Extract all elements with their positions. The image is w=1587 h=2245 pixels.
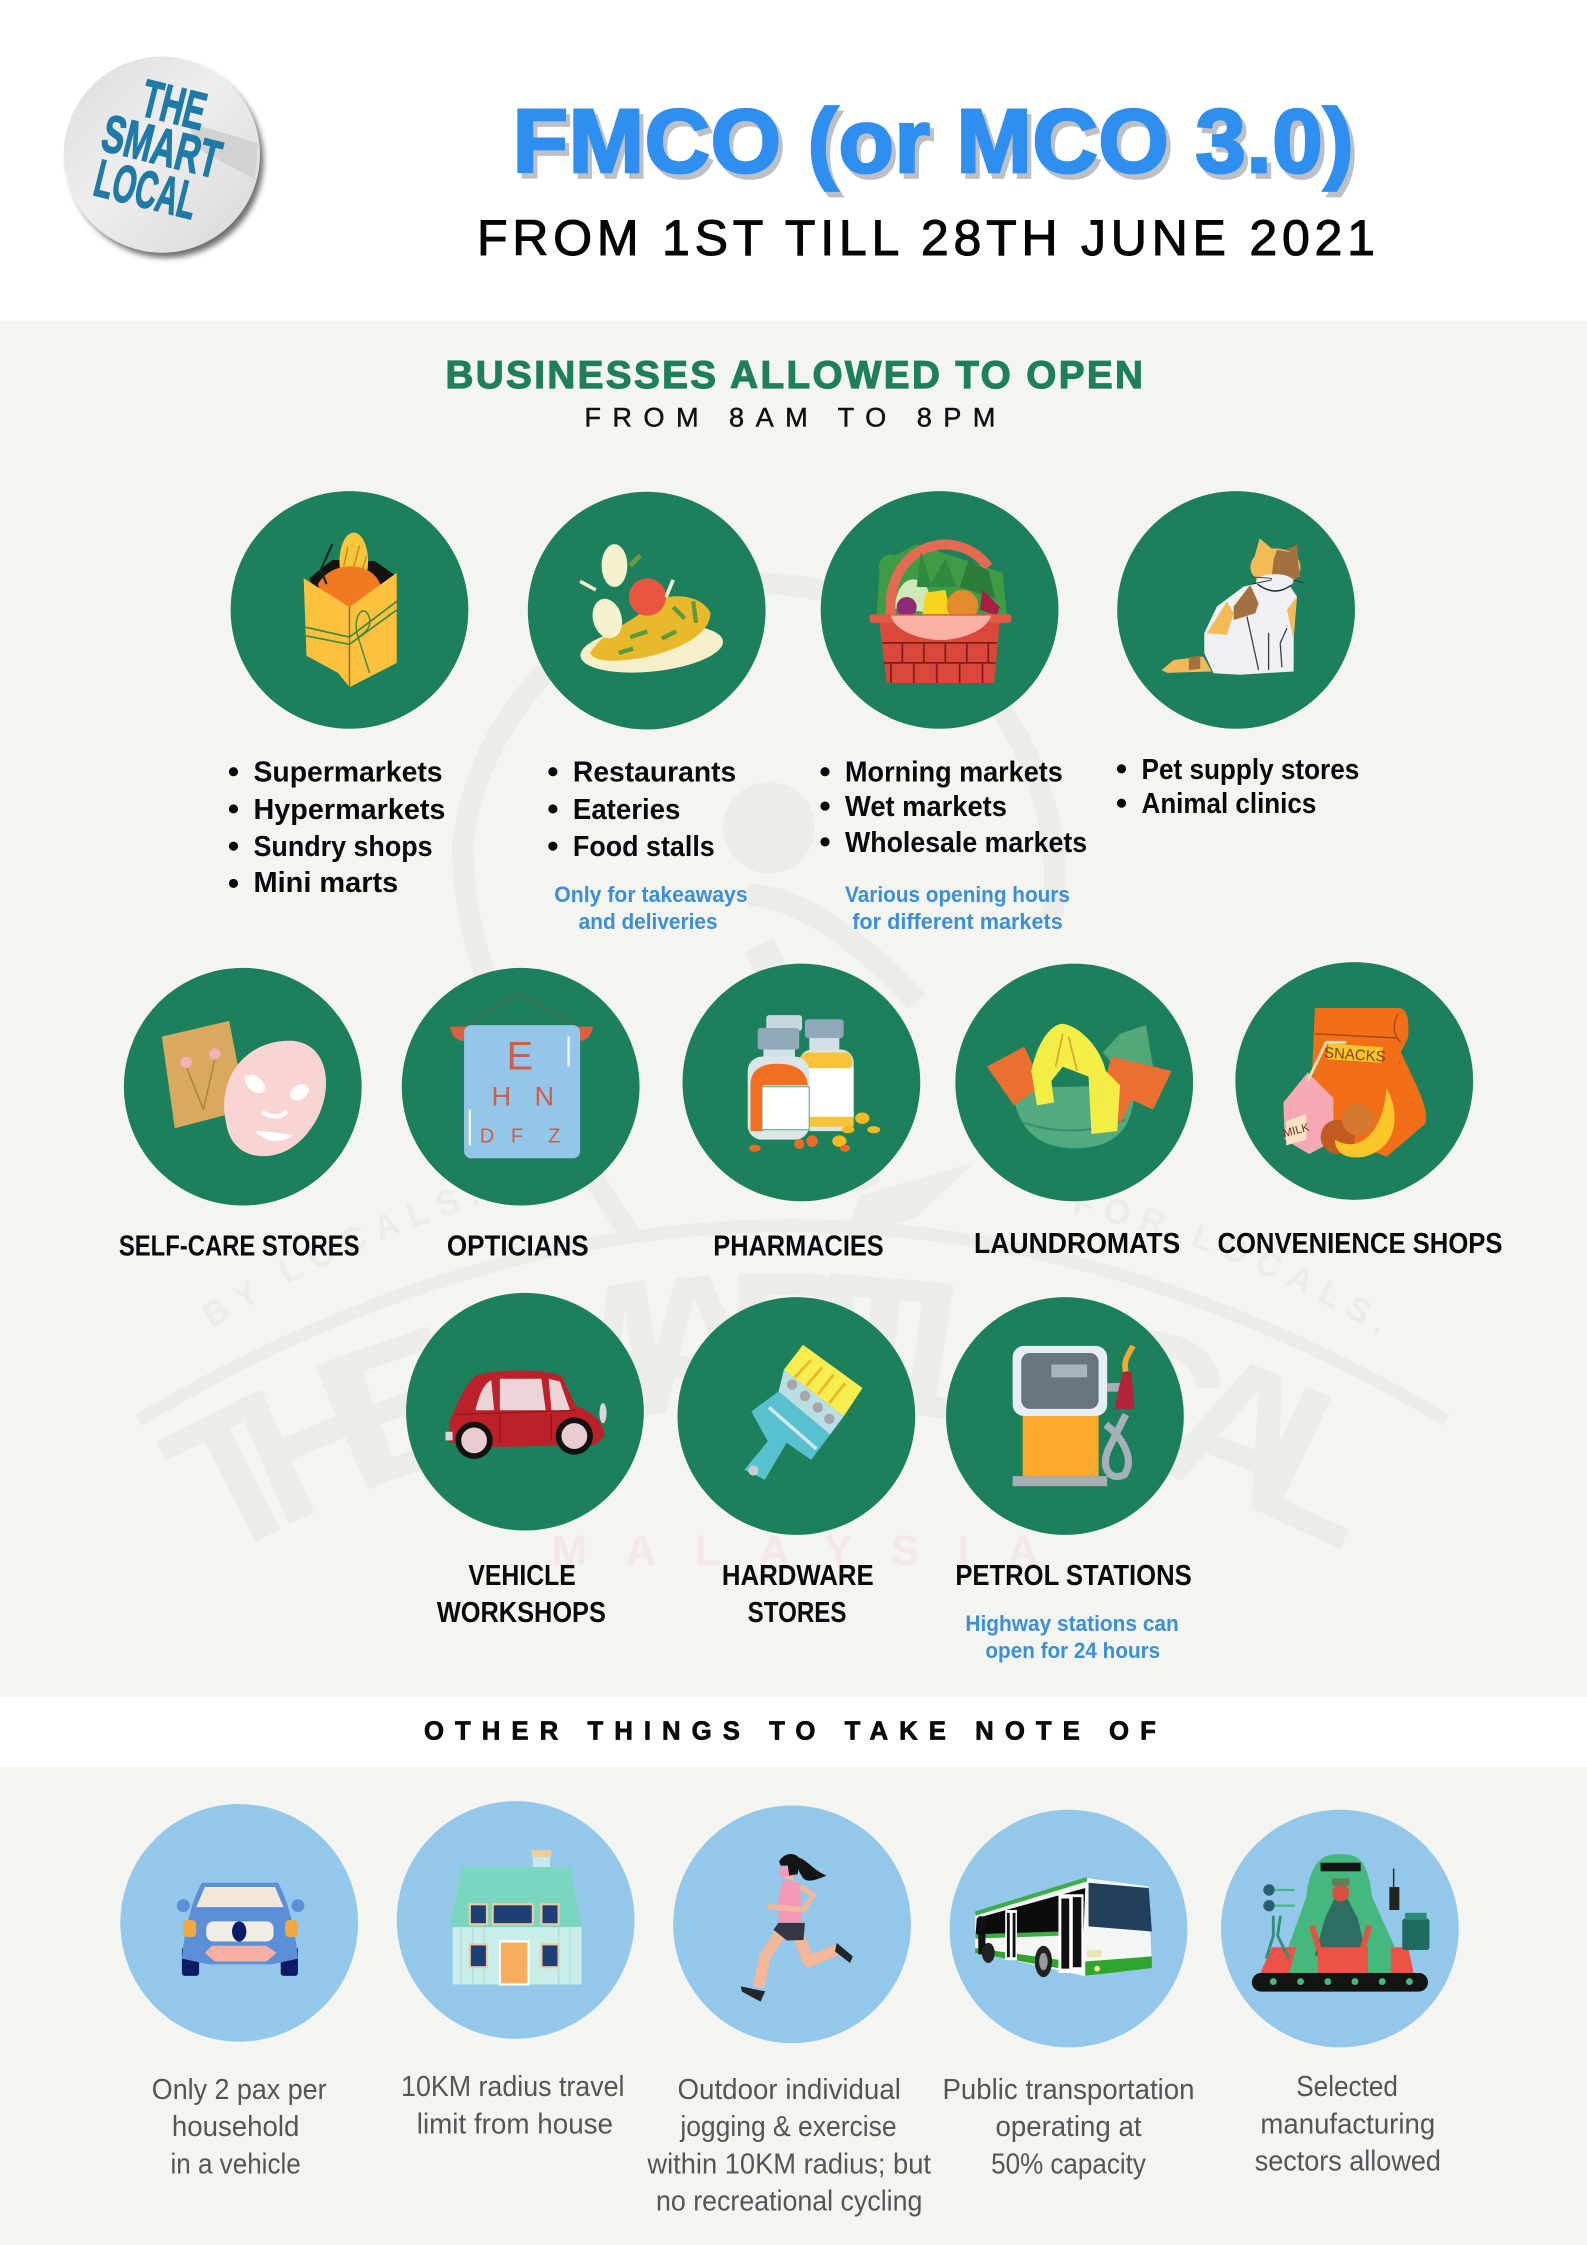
circle: opticians [402, 968, 640, 1206]
caption: exercise: Outdoor individual [677, 2074, 901, 2106]
caption: public transport: Public transportation [942, 2074, 1195, 2106]
caption: exercise: no recreational cycling [656, 2186, 922, 2218]
caption: passengers: household [172, 2111, 299, 2143]
logo: The Smart Local sticker: THE [135, 69, 212, 142]
heading: businesses allowed to open: BUSINESSES ALLOWED TO OPEN [445, 354, 1143, 397]
circle: opticians: E [507, 1035, 533, 1079]
circle: opticians: F [511, 1126, 523, 1148]
list: supermarkets: Sundry shops [254, 831, 433, 863]
note: highway stations: Highway stations can [965, 1611, 1179, 1636]
label: self-care stores: SELF-CARE STORES [119, 1231, 360, 1263]
circle: pharmacies [682, 964, 920, 1201]
list: markets: Wet markets [845, 791, 1007, 823]
circle: laundromats [955, 964, 1193, 1201]
logo: The Smart Local sticker [64, 57, 264, 258]
circle: convenience shops [1235, 962, 1473, 1200]
logo: The Smart Local sticker: LOCAL [89, 149, 203, 231]
circle: opticians: N [534, 1080, 554, 1111]
label: convenience shops: CONVENIENCE SHOPS [1217, 1228, 1502, 1260]
list: restaurants: Eateries [573, 794, 680, 826]
note: market hours: for different markets [852, 909, 1063, 934]
heading: other things to take note of: OTHER THINGS TO TAKE NOTE OF [424, 1718, 1156, 1746]
subtitle: dates: FROM 1ST TILL 28TH JUNE 2021 [477, 210, 1375, 266]
circle: jogging [673, 1805, 911, 2043]
label: petrol stations: PETROL STATIONS [955, 1560, 1192, 1592]
caption: travel limit [401, 2071, 624, 2140]
logo: The Smart Local sticker: SMART [96, 104, 227, 190]
label: vehicle workshops: WORKSHOPS [437, 1597, 606, 1629]
caption: manufacturing: manufacturing [1260, 2108, 1435, 2140]
label: laundromats: LAUNDROMATS [974, 1228, 1180, 1260]
circle: public transportation [950, 1810, 1187, 2047]
watermark: The Smart Local Malaysia: THE SMART LOCAL [240, 1278, 1279, 1498]
circle: restaurants [528, 492, 766, 729]
list: pet stores: Pet supply stores [1142, 754, 1359, 786]
list: pet stores [1117, 754, 1359, 820]
label: hardware stores: STORES [748, 1597, 846, 1629]
panel: notes background [0, 1767, 1587, 2245]
circle: manufacturing [1221, 1810, 1459, 2047]
circle: 10KM travel limit [397, 1801, 635, 2039]
caption: exercise: within 10KM radius; but [646, 2148, 931, 2180]
watermark: The Smart Local Malaysia: BY LOCALS. [196, 1172, 493, 1335]
circle: vehicle workshops [406, 1293, 644, 1531]
note: takeaways [554, 882, 748, 934]
caption: travel limit: limit from house [417, 2108, 613, 2140]
label: opticians: OPTICIANS [447, 1231, 589, 1263]
list: pet stores: Animal clinics [1142, 788, 1316, 820]
note: highway stations: open for 24 hours [985, 1638, 1160, 1663]
label: vehicle workshops: VEHICLE [468, 1560, 576, 1592]
note: market hours [845, 882, 1070, 934]
circle: self-care stores [124, 968, 362, 1206]
list: markets [820, 757, 1087, 859]
watermark: The Smart Local Malaysia: MALAYSIA [551, 1527, 1038, 1575]
circle: convenience shops: MILK [1282, 1122, 1311, 1140]
note: takeaways: Only for takeaways [554, 882, 748, 907]
circle: hardware stores [677, 1297, 915, 1535]
label: hardware stores [722, 1560, 874, 1629]
list: markets: Morning markets [845, 757, 1063, 789]
caption: passengers [152, 2074, 327, 2180]
note: market hours: Various opening hours [845, 882, 1070, 907]
list: supermarkets [229, 757, 445, 899]
panel: businesses background [0, 321, 1587, 1697]
caption: manufacturing [1255, 2071, 1441, 2178]
list: supermarkets: Mini marts [254, 867, 398, 899]
note: takeaways: and deliveries [579, 909, 718, 934]
caption: manufacturing: Selected [1296, 2071, 1398, 2103]
title: FMCO (or MCO 3.0) [517, 97, 1358, 198]
caption: public transport: 50% capacity [991, 2148, 1146, 2180]
list: supermarkets: Supermarkets [254, 757, 443, 789]
circle: convenience shops: SNACKS [1323, 1044, 1386, 1066]
label: vehicle workshops [437, 1560, 606, 1629]
watermark: The Smart Local Malaysia: FOR LOCALS. [1070, 1185, 1404, 1347]
caption: public transport [942, 2074, 1195, 2180]
circle: opticians: Z [548, 1126, 560, 1148]
label: pharmacies: PHARMACIES [713, 1231, 884, 1263]
circle: opticians: D [480, 1126, 494, 1148]
list: markets: Wholesale markets [845, 827, 1087, 859]
title: FMCO (or MCO 3.0) [513, 91, 1354, 192]
circle: supermarkets [231, 491, 468, 729]
list: supermarkets: Hypermarkets [254, 794, 445, 826]
circle: pet supply stores [1117, 491, 1355, 729]
caption: manufacturing: sectors allowed [1255, 2146, 1441, 2178]
note: highway stations [965, 1611, 1179, 1663]
circle: morning markets [821, 491, 1058, 729]
caption: passengers: Only 2 pax per [152, 2074, 327, 2106]
caption: exercise: jogging & exercise [679, 2111, 897, 2143]
list: restaurants: Food stalls [573, 831, 715, 863]
caption: public transport: operating at [995, 2111, 1142, 2143]
caption: travel limit: 10KM radius travel [401, 2071, 624, 2103]
circle: car passengers [120, 1804, 358, 2042]
circle: petrol stations [946, 1297, 1184, 1535]
circle: opticians: H [491, 1080, 511, 1111]
subheading: hours: FROM 8AM TO 8PM [584, 402, 995, 433]
caption: exercise [646, 2074, 931, 2218]
list: restaurants [548, 757, 736, 863]
label: hardware stores: HARDWARE [722, 1560, 874, 1592]
list: restaurants: Restaurants [573, 757, 736, 789]
caption: passengers: in a vehicle [170, 2148, 301, 2180]
